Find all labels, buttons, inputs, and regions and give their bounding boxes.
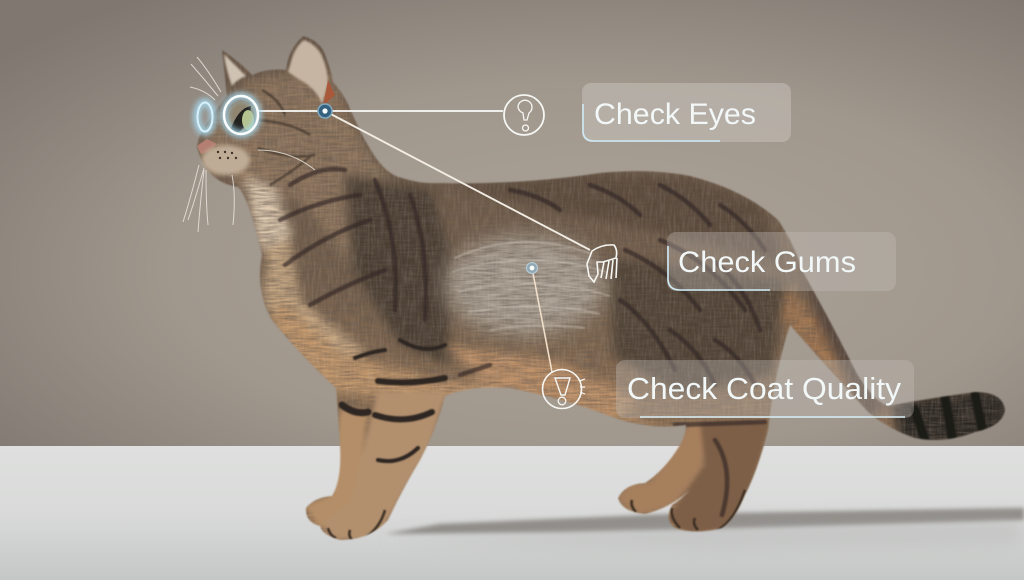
icon: magnifier — [504, 95, 544, 135]
ears — [224, 40, 335, 106]
fur texture — [200, 72, 1005, 540]
cheek stripes — [256, 90, 315, 185]
label: Check Gums: Check Gums — [678, 246, 856, 279]
callout lines — [258, 111, 590, 372]
node: coat — [526, 262, 538, 274]
belly warm fur — [270, 300, 665, 430]
leg tones — [306, 392, 770, 540]
fur strands — [452, 242, 610, 330]
label: Check Eyes: Check Eyes — [594, 98, 756, 131]
paw toes — [328, 490, 745, 540]
eye — [227, 102, 257, 134]
nose — [197, 139, 217, 154]
whiskers — [183, 57, 315, 232]
grey fur patch — [445, 235, 605, 335]
floor — [0, 446, 1024, 580]
label: Check Coat Quality: Check Coat Quality — [627, 371, 902, 406]
label: Check Coat Quality — [616, 360, 914, 418]
background wall — [0, 0, 1024, 447]
tail and rear tones — [779, 282, 1006, 441]
body stripes — [280, 169, 982, 515]
muzzle — [202, 145, 250, 175]
icon: brush — [542, 370, 585, 408]
cat body base — [196, 36, 968, 541]
eye highlight rings — [197, 96, 258, 134]
muzzle spots — [217, 151, 237, 159]
head tones — [198, 69, 388, 360]
shoulder dark fur — [345, 174, 785, 395]
label: Check Gums — [667, 232, 896, 291]
label: Check Eyes — [582, 83, 791, 142]
floor shadow — [380, 508, 1024, 548]
node: ear — [318, 104, 332, 118]
icon: paw — [587, 245, 617, 282]
cat illustration — [180, 30, 1020, 550]
